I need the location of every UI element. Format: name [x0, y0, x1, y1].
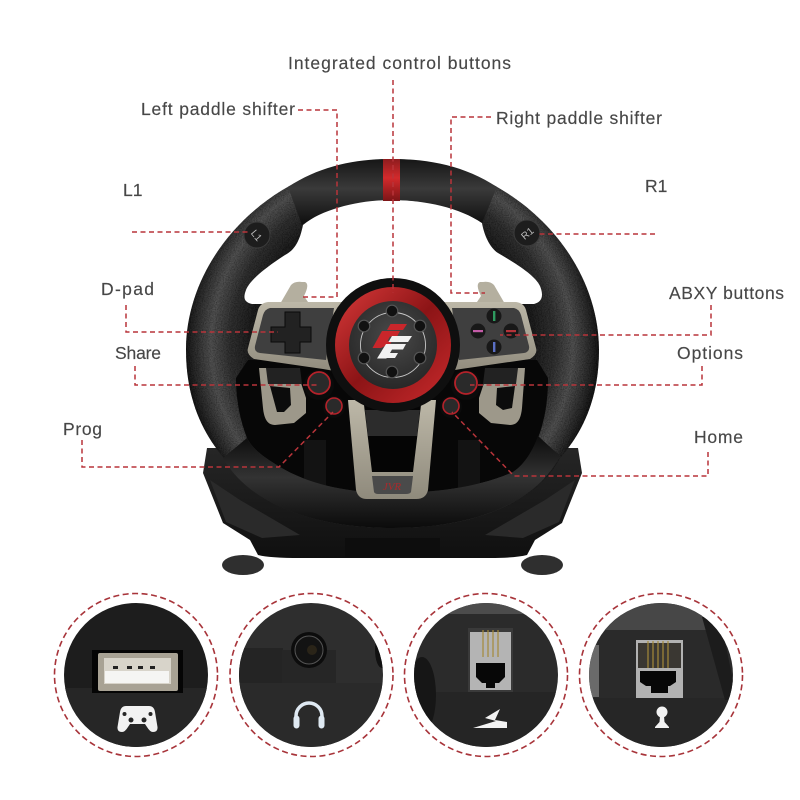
red ring	[335, 287, 451, 403]
lower spoke frame	[348, 400, 436, 499]
button left mark	[473, 330, 483, 332]
port frame	[468, 628, 513, 692]
leader D-pad	[126, 305, 278, 332]
badge script: JVR	[383, 481, 401, 493]
detail: shifter port	[580, 594, 742, 756]
leader options	[470, 366, 702, 385]
dashed ring	[580, 594, 742, 756]
label: Options: Options	[677, 343, 743, 363]
prog disc	[326, 398, 342, 414]
gamepad body	[117, 706, 158, 732]
label: Prog: Prog	[63, 419, 102, 439]
L1 button disc	[244, 222, 270, 248]
rim	[186, 159, 599, 528]
rim bottom segment	[223, 436, 560, 528]
button left	[470, 324, 486, 338]
lower spoke opening	[364, 405, 421, 472]
dashed ring	[230, 594, 393, 756]
ABXY buttons	[470, 308, 518, 354]
lower spoke badge plate	[372, 476, 413, 494]
button right	[504, 324, 518, 338]
logo red	[372, 324, 407, 348]
inner disc	[349, 301, 437, 389]
leader integrated	[392, 80, 394, 293]
top texture	[448, 603, 524, 614]
leader right paddle	[451, 117, 491, 293]
lower spoke dark shade	[365, 410, 420, 436]
label: integrated control buttons: Integrated control buttons	[288, 53, 511, 73]
share disc	[308, 372, 330, 394]
base front panel	[345, 538, 440, 557]
detail: headphone jack	[230, 594, 393, 756]
label: Home: Home	[694, 427, 743, 447]
prog button	[323, 396, 345, 418]
L1 button	[244, 222, 270, 248]
photo	[239, 603, 383, 747]
right back paddle upper shade	[483, 368, 518, 384]
USB tongue	[105, 671, 169, 683]
detail: USB port	[54, 594, 218, 756]
photo background	[585, 600, 737, 750]
bolt ring	[360, 312, 426, 378]
label: left paddle shifter: Left paddle shifter	[141, 99, 295, 119]
lower panel	[235, 683, 387, 748]
port contacts	[648, 641, 668, 668]
right back paddle cutout	[496, 386, 515, 410]
label: right paddle shifter: Right paddle shifter	[496, 108, 662, 128]
label: D-pad: D-pad	[101, 279, 154, 299]
button bottom mark	[493, 342, 495, 352]
lower panel	[60, 688, 212, 748]
photo background	[235, 600, 387, 750]
D-pad	[271, 312, 311, 353]
label: Share: Share	[115, 343, 161, 363]
port cavity	[640, 671, 676, 693]
interior pedestal glow right	[458, 440, 480, 490]
hub	[326, 278, 460, 412]
button bottom	[486, 340, 502, 354]
logo white	[377, 336, 412, 358]
left paddle shifter	[280, 282, 310, 305]
USB shell	[98, 653, 178, 691]
jack	[291, 632, 327, 668]
suction foot left	[222, 555, 264, 575]
icon: joystick	[655, 706, 669, 728]
jack ring	[295, 636, 323, 664]
label: ABXY buttons: ABXY buttons	[669, 283, 784, 303]
home backing	[440, 396, 462, 418]
jack pin	[307, 645, 317, 655]
top texture	[604, 603, 718, 630]
leader home	[452, 412, 708, 476]
dashed ring	[54, 594, 218, 756]
left back paddle	[259, 368, 306, 425]
prog backing	[323, 396, 345, 418]
USB contacts	[113, 666, 155, 669]
R1 button mark: R1	[520, 226, 537, 242]
right back paddle	[479, 368, 525, 425]
port cavity	[476, 663, 505, 688]
lower panel	[416, 692, 556, 747]
left block	[235, 648, 283, 683]
red centre band	[383, 159, 400, 201]
port upper	[470, 632, 511, 690]
leader share	[135, 366, 320, 385]
left control plate	[255, 308, 334, 360]
port upper	[638, 643, 681, 668]
gamepad controls	[122, 712, 152, 722]
icon: headphones	[294, 703, 324, 728]
icon: pedal	[473, 709, 507, 728]
base left facet	[210, 480, 300, 538]
options button	[451, 370, 481, 400]
bolts	[358, 305, 426, 378]
dashed ring	[404, 594, 568, 756]
photo background	[410, 600, 562, 750]
L1 button mark: L1	[248, 228, 264, 244]
home disc	[443, 398, 459, 414]
rim top segment	[288, 159, 497, 225]
share backing	[304, 370, 334, 400]
USB inner	[104, 658, 171, 684]
port contacts	[483, 630, 498, 657]
photo background	[60, 600, 212, 750]
side connector	[375, 643, 383, 668]
interior pedestal glow left	[304, 440, 326, 490]
R1 button disc	[514, 220, 540, 246]
left back paddle cutout	[270, 386, 291, 412]
base right facet	[485, 480, 575, 538]
label: R1: R1	[645, 176, 667, 196]
share button	[304, 370, 334, 400]
home button	[440, 396, 462, 418]
button top mark	[493, 311, 495, 321]
port frame	[636, 640, 683, 698]
label: L1: L1	[123, 180, 142, 200]
neighbouring port	[589, 645, 599, 697]
leader L1	[132, 231, 250, 233]
R1 button	[514, 220, 540, 246]
raised block	[282, 650, 336, 683]
base	[203, 448, 582, 558]
hub outer	[326, 278, 460, 412]
detail: pedal port	[404, 594, 568, 756]
suction foot right	[521, 555, 563, 575]
lower panel	[592, 698, 730, 747]
options backing	[451, 370, 481, 400]
leader left paddle	[298, 110, 337, 297]
icon: gamepad	[117, 706, 158, 732]
steering wheel	[186, 159, 599, 575]
side wedge	[702, 617, 733, 700]
upper opening	[244, 200, 542, 304]
leader prog	[82, 412, 333, 467]
left spoke frame	[248, 302, 352, 374]
button top	[486, 308, 502, 324]
leader lines	[82, 80, 711, 476]
button right mark	[506, 330, 516, 332]
leader R1	[537, 233, 655, 235]
right spoke frame	[432, 302, 536, 374]
left back paddle upper shade	[266, 368, 302, 384]
cable ribs	[414, 657, 436, 722]
lower interior	[236, 360, 548, 493]
right control plate	[452, 308, 529, 360]
photo	[60, 600, 212, 750]
options disc	[455, 372, 477, 394]
photo	[585, 600, 737, 750]
right paddle shifter	[475, 282, 505, 305]
leader ABXY	[500, 305, 711, 335]
port slot	[92, 650, 183, 693]
photo	[414, 603, 558, 747]
